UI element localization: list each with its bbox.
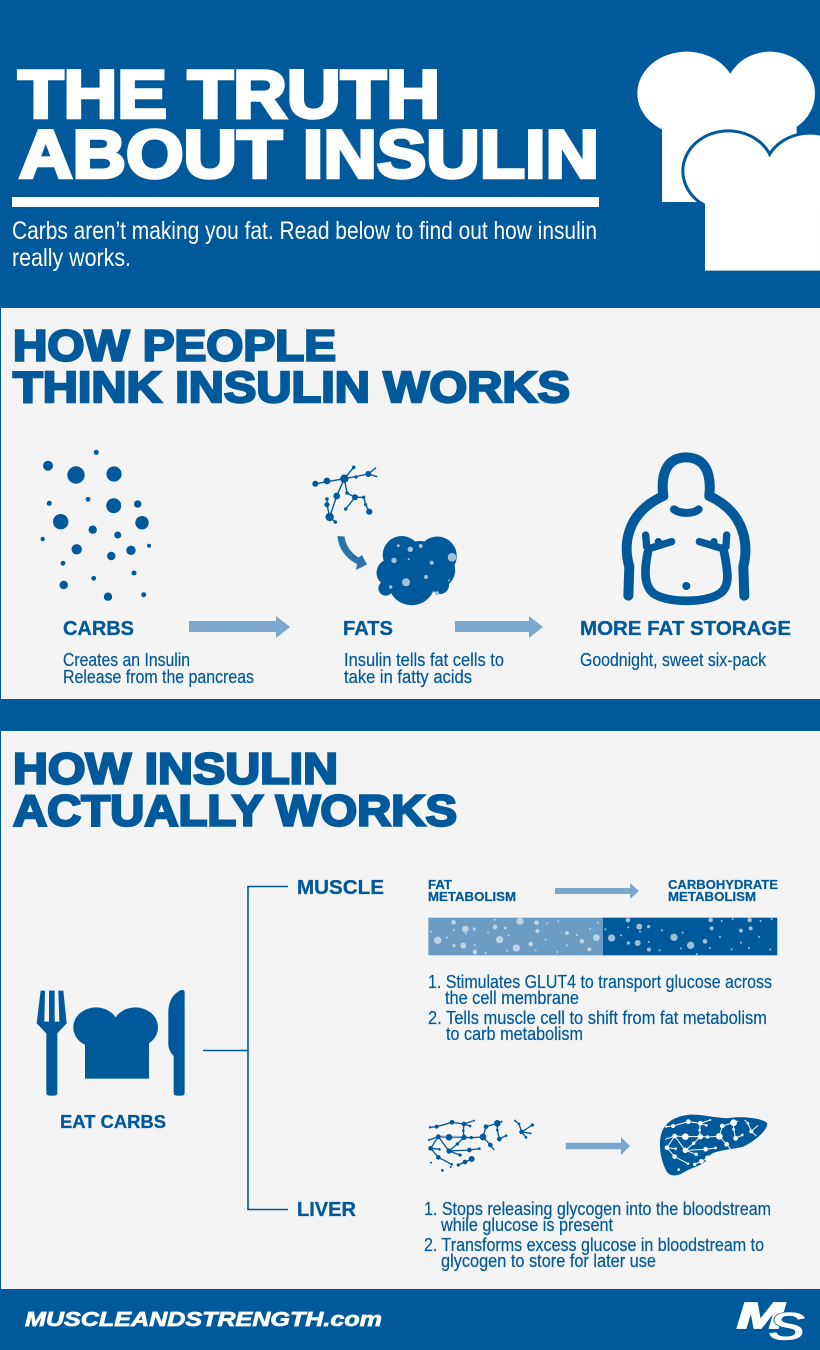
icon: fatty acids network bbox=[312, 466, 377, 524]
heading: ACTUALLY WORKS bbox=[13, 786, 457, 836]
bracket connector bbox=[203, 886, 288, 1210]
arrow: fats to storage bbox=[455, 616, 543, 638]
title bbox=[18, 56, 599, 192]
text: carbs description bbox=[63, 649, 254, 687]
icon: carb dots bbox=[40, 450, 151, 601]
label: fat metabolism: METABOLISM bbox=[428, 890, 516, 904]
icon: liver bbox=[660, 1115, 767, 1176]
logo: M&S: & bbox=[769, 1321, 776, 1332]
logo: M&S: S bbox=[768, 1305, 806, 1349]
text: muscle steps bbox=[428, 971, 772, 1044]
text: carbs description: Creates an Insulin bbox=[63, 649, 190, 670]
text: fats description: Insulin tells fat cells to bbox=[344, 649, 504, 670]
arrow: metabolism shift bbox=[555, 883, 639, 899]
label: carbohydrate metabolism: CARBOHYDRATE bbox=[668, 878, 778, 892]
panel: how insulin actually works bbox=[1, 731, 820, 1289]
text: muscle steps: 2. Tells muscle cell to shift from fat metabolism bbox=[428, 1007, 767, 1028]
arrow: carbs to fats bbox=[189, 616, 290, 638]
label: carbohydrate metabolism bbox=[668, 878, 778, 904]
icon: chef hats bbox=[637, 52, 820, 273]
subtitle: Carbs aren’t making you fat. Read below to find out how insulin bbox=[12, 217, 597, 245]
label: fat metabolism: FAT bbox=[428, 878, 452, 892]
label: liver: LIVER bbox=[297, 1199, 357, 1221]
text: muscle steps: 1. Stimulates GLUT4 to transport glucose across bbox=[428, 971, 772, 992]
text: muscle steps: to carb metabolism bbox=[446, 1023, 583, 1044]
label: fats: FATS bbox=[343, 618, 393, 640]
label: muscle: MUSCLE bbox=[297, 877, 384, 899]
subtitle: really works. bbox=[12, 244, 131, 272]
arrow: glycogen to liver bbox=[566, 1137, 630, 1155]
metabolism bar bbox=[428, 918, 777, 955]
label: fat metabolism bbox=[428, 878, 516, 904]
heading bbox=[13, 322, 570, 412]
title: THE TRUTH bbox=[18, 56, 440, 132]
arrow: curved into fat cell bbox=[338, 536, 367, 570]
text: storage description: Goodnight, sweet six-pack bbox=[580, 649, 767, 670]
label: carbohydrate metabolism: METABOLISM bbox=[668, 890, 756, 904]
text: liver steps: glycogen to store for later use bbox=[441, 1250, 656, 1271]
icon: fat cell bbox=[376, 536, 457, 605]
label: carbs: CARBS bbox=[63, 618, 134, 640]
heading: THINK INSULIN WORKS bbox=[13, 363, 570, 412]
heading bbox=[13, 744, 457, 836]
text: carbs description: Release from the pancreas bbox=[63, 666, 254, 687]
heading: HOW PEOPLE bbox=[13, 322, 336, 370]
icon: overweight torso bbox=[627, 457, 745, 601]
icon: fork, hat and knife bbox=[37, 990, 185, 1096]
text: liver steps: while glucose is present bbox=[440, 1214, 613, 1235]
text: muscle steps: the cell membrane bbox=[445, 987, 579, 1008]
text: fats description: take in fatty acids bbox=[344, 666, 472, 687]
footer bbox=[25, 1295, 806, 1349]
logo: M&S bbox=[737, 1295, 806, 1349]
panel: how people think insulin works bbox=[1, 308, 820, 699]
title: ABOUT INSULIN bbox=[19, 116, 599, 192]
title underline bbox=[12, 197, 599, 207]
icon: glycogen network bbox=[428, 1120, 534, 1172]
text: liver steps: 2. Transforms excess glucose in bloodstream to bbox=[424, 1234, 764, 1255]
text: fats description bbox=[344, 649, 504, 687]
header banner bbox=[12, 52, 820, 273]
text: liver steps: 1. Stops releasing glycogen into the bloodstream bbox=[424, 1198, 771, 1219]
logo: M&S: M bbox=[737, 1295, 786, 1336]
label: eat carbs: EAT CARBS bbox=[60, 1112, 166, 1132]
text: liver steps bbox=[424, 1198, 771, 1271]
website url: MUSCLEANDSTRENGTH.com bbox=[25, 1309, 382, 1331]
subtitle bbox=[12, 217, 597, 272]
heading: HOW INSULIN bbox=[13, 744, 338, 794]
label: more fat storage: MORE FAT STORAGE bbox=[580, 618, 791, 640]
